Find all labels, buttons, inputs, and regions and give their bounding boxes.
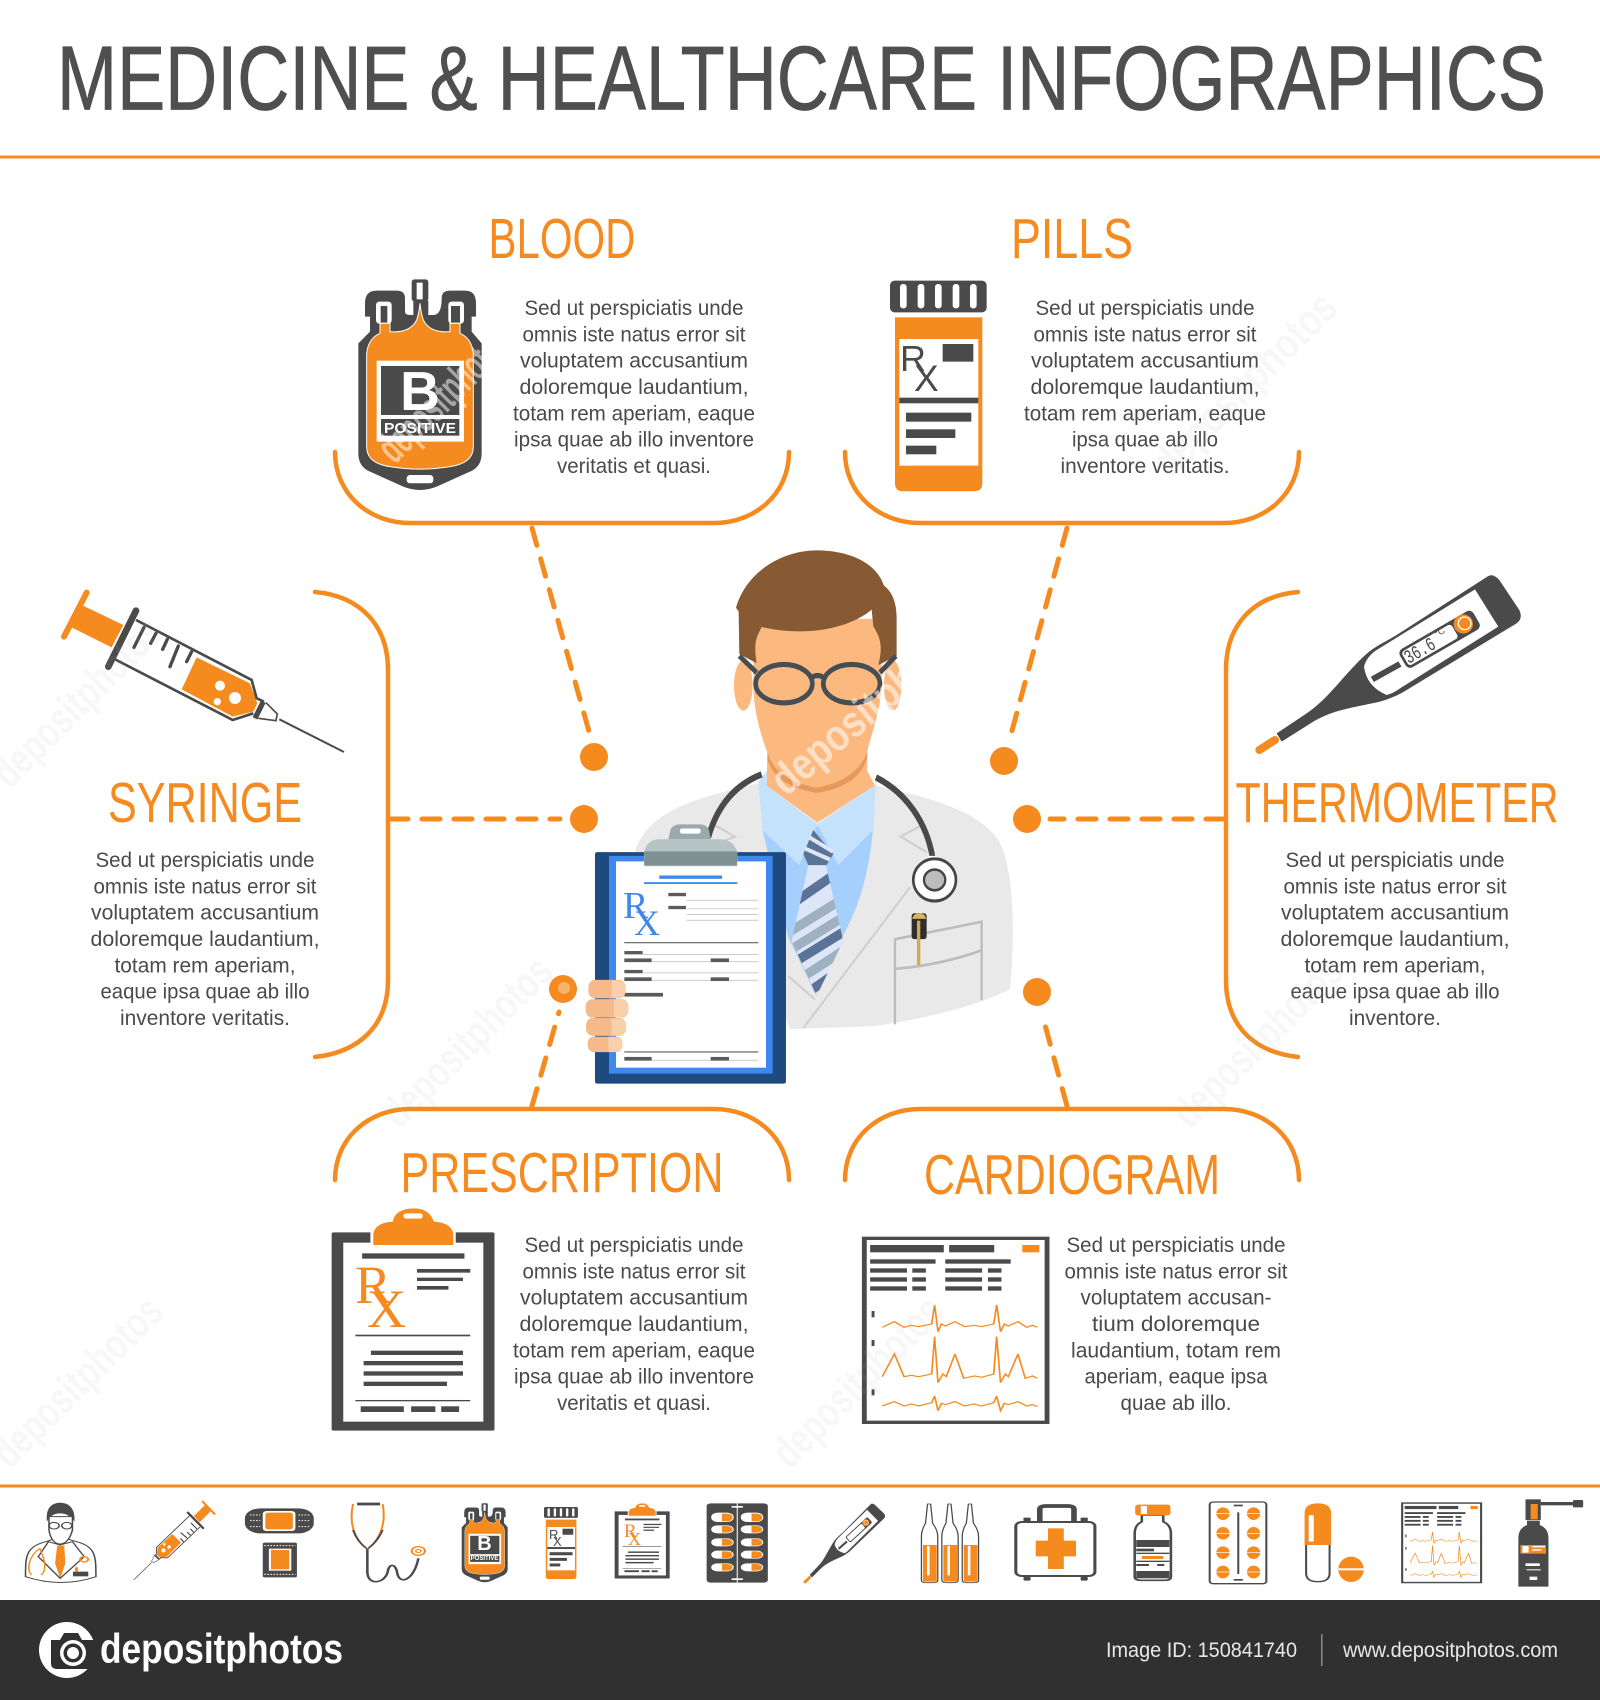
mini icon: prescription clipboard: R bbox=[624, 1521, 637, 1542]
footer url: www.depositphotos.com bbox=[1342, 1639, 1558, 1662]
text block: thermometer bbox=[1280, 849, 1510, 1030]
icon: thermometer: °C bbox=[1433, 625, 1447, 639]
footer logo: depositphotos bbox=[100, 1625, 343, 1672]
shirt bbox=[762, 826, 873, 997]
text block: syringe: doloremque laudantium, bbox=[90, 928, 320, 951]
text block: thermometer: Sed ut perspiciatis unde bbox=[1286, 849, 1504, 872]
icon: cardiogram sheet bbox=[864, 1238, 1047, 1422]
bracket: prescription bbox=[335, 1109, 789, 1180]
bracket: pills bbox=[845, 452, 1299, 523]
text block: prescription: omnis iste natus error sit bbox=[522, 1260, 746, 1283]
footer logo bbox=[39, 1622, 343, 1678]
text block: prescription bbox=[513, 1234, 755, 1415]
text block: thermometer: doloremque laudantium, bbox=[1280, 928, 1510, 951]
text block: syringe: eaque ipsa quae ab illo bbox=[100, 981, 310, 1004]
mini icon: blood bag bbox=[462, 1503, 508, 1582]
mini icon: thermometer bbox=[792, 1501, 895, 1582]
connector: pills to doctor bbox=[990, 528, 1067, 775]
text block: syringe: inventore veritatis. bbox=[120, 1007, 290, 1030]
text block: pills: Sed ut perspiciatis unde bbox=[1036, 297, 1254, 320]
mini icon: stethoscope bbox=[352, 1504, 425, 1582]
icon: thermometer: 36.6 bbox=[1401, 634, 1440, 669]
text block: prescription: Sed ut perspiciatis unde bbox=[524, 1234, 744, 1257]
text block: blood: doloremque laudantium, bbox=[520, 376, 748, 399]
panel: thermometer bbox=[1226, 575, 1558, 1057]
mini icon: pill bottle: X bbox=[553, 1534, 562, 1549]
clipboard inner bbox=[609, 856, 773, 1074]
heading: blood: BLOOD bbox=[488, 207, 636, 271]
icon: pill bottle: R bbox=[900, 338, 926, 379]
panel: blood bbox=[335, 207, 789, 523]
text block: pills: doloremque laudantium, bbox=[1030, 376, 1260, 399]
mini icon: bandage bbox=[245, 1508, 314, 1577]
mini icon: throat spray bbox=[1518, 1499, 1583, 1587]
text block: syringe bbox=[90, 849, 320, 1030]
glasses bbox=[739, 656, 896, 703]
panel: cardiogram bbox=[845, 1109, 1299, 1422]
text block: prescription: doloremque laudantium, bbox=[520, 1313, 748, 1336]
text block: thermometer: omnis iste natus error sit bbox=[1284, 875, 1507, 898]
icon: blood bag: POSITIVE bbox=[384, 420, 456, 437]
mini icon: doctor bbox=[26, 1503, 96, 1582]
clip bbox=[644, 824, 737, 866]
mini icon: pill bottle: R bbox=[549, 1527, 558, 1542]
text block: thermometer: voluptatem accusantium bbox=[1281, 902, 1509, 925]
mini icon: ampoules bbox=[921, 1504, 979, 1583]
bracket: thermometer bbox=[1226, 592, 1298, 1057]
heading: prescription: PRESCRIPTION bbox=[400, 1141, 724, 1205]
icon: pill bottle: X bbox=[914, 358, 939, 399]
mini icon: first aid kit bbox=[1016, 1506, 1095, 1581]
watermarks: depositphotos bbox=[1142, 283, 1347, 487]
mini icon: tablets bbox=[1210, 1502, 1266, 1584]
stethoscope bbox=[708, 774, 956, 901]
connector: thermometer to doctor bbox=[1013, 805, 1224, 833]
footer image id: Image ID: 150841740 bbox=[1106, 1639, 1297, 1662]
connector: prescription to doctor bbox=[532, 975, 577, 1106]
text block: cardiogram: laudantium, totam rem bbox=[1071, 1339, 1281, 1362]
text block: blood: veritatis et quasi. bbox=[557, 455, 711, 478]
text block: pills: totam rem aperiam, eaque bbox=[1024, 402, 1266, 425]
text block: cardiogram: omnis iste natus error sit bbox=[1064, 1260, 1288, 1283]
footer bar bbox=[0, 1600, 1600, 1700]
connector: blood to doctor bbox=[532, 528, 608, 771]
text block: prescription: ipsa quae ab illo inventore bbox=[514, 1366, 754, 1389]
heading: pills: PILLS bbox=[1011, 207, 1133, 271]
text block: pills: inventore veritatis. bbox=[1060, 455, 1230, 478]
clipboard board bbox=[595, 852, 786, 1084]
text block: cardiogram: quae ab illo. bbox=[1120, 1392, 1232, 1415]
text block: thermometer: inventore. bbox=[1349, 1007, 1441, 1030]
mini icon: prescription clipboard: X bbox=[628, 1529, 641, 1549]
bracket: blood bbox=[335, 452, 789, 523]
text block: prescription: veritatis et quasi. bbox=[557, 1392, 711, 1415]
collar right bbox=[817, 771, 877, 865]
text block: syringe: Sed ut perspiciatis unde bbox=[96, 849, 314, 872]
text block: blood: ipsa quae ab illo inventore bbox=[514, 429, 754, 452]
illustration: doctor with clipboard bbox=[586, 550, 1013, 1084]
clipboard Rx bbox=[623, 885, 660, 943]
bracket: cardiogram bbox=[845, 1109, 1299, 1180]
text block: syringe: omnis iste natus error sit bbox=[94, 875, 317, 898]
hand bbox=[586, 980, 628, 1052]
icon: pill bottle bbox=[890, 281, 987, 491]
text block: pills: voluptatem accusantium bbox=[1031, 350, 1259, 373]
watermarks: depositphotos bbox=[1162, 947, 1353, 1137]
mini icon: cardiogram bbox=[1402, 1503, 1481, 1583]
pen bbox=[912, 913, 927, 965]
mini icon: pill bottle bbox=[544, 1507, 578, 1579]
panel: prescription bbox=[332, 1109, 789, 1431]
text block: cardiogram bbox=[1064, 1234, 1288, 1415]
panel: pills bbox=[845, 207, 1299, 523]
watermarks bbox=[0, 283, 1353, 1477]
coat lapels bbox=[713, 824, 927, 1028]
text block: blood: Sed ut perspiciatis unde bbox=[524, 297, 744, 320]
chin shadow bbox=[767, 752, 867, 793]
text block: blood: voluptatem accusantium bbox=[520, 350, 748, 373]
watermarks: depositphotos bbox=[762, 1287, 953, 1477]
bracket: syringe bbox=[315, 592, 388, 1057]
collar left bbox=[758, 771, 817, 865]
icon: blood bag bbox=[358, 279, 482, 490]
mini icon: syringe bbox=[134, 1489, 217, 1598]
text block: pills: omnis iste natus error sit bbox=[1034, 323, 1257, 346]
clipboard Rx: R bbox=[623, 885, 649, 927]
doctor coat bbox=[635, 782, 1013, 1029]
hair bbox=[736, 550, 897, 665]
prescription sheet bbox=[616, 861, 766, 1068]
text block: blood bbox=[513, 297, 755, 478]
text block: cardiogram: Sed ut perspiciatis unde bbox=[1066, 1234, 1286, 1257]
text block: syringe: voluptatem accusantium bbox=[91, 902, 319, 925]
watermarks: depositphotos bbox=[367, 317, 522, 472]
text block: thermometer: eaque ipsa quae ab illo bbox=[1290, 981, 1500, 1004]
text block: thermometer: totam rem aperiam, bbox=[1304, 954, 1486, 977]
icon strip bbox=[0, 1484, 1600, 1598]
text block: pills: ipsa quae ab illo bbox=[1072, 429, 1218, 452]
mini icon: prescription clipboard bbox=[615, 1503, 670, 1578]
text block: cardiogram: tium doloremque bbox=[1092, 1313, 1260, 1336]
text block: blood: totam rem aperiam, eaque bbox=[513, 402, 755, 425]
icon: prescription clipboard: X bbox=[367, 1279, 406, 1339]
text block: syringe: totam rem aperiam, bbox=[114, 954, 296, 977]
text block: pills bbox=[1024, 297, 1266, 478]
text block: blood: omnis iste natus error sit bbox=[522, 323, 746, 346]
text block: prescription: totam rem aperiam, eaque bbox=[513, 1339, 755, 1362]
tie bbox=[792, 830, 843, 996]
icon: prescription clipboard bbox=[332, 1208, 494, 1431]
neck and face bbox=[753, 619, 882, 823]
mini icon: blister pack bbox=[707, 1503, 768, 1583]
heading: cardiogram: CARDIOGRAM bbox=[924, 1143, 1220, 1207]
text block: cardiogram: voluptatem accusan- bbox=[1080, 1287, 1272, 1310]
icon: prescription clipboard: R bbox=[355, 1255, 391, 1315]
heading: syringe: SYRINGE bbox=[108, 771, 302, 835]
panel: syringe bbox=[64, 592, 388, 1057]
text block: cardiogram: aperiam, eaque ipsa bbox=[1084, 1366, 1268, 1389]
watermarks: depositphotos bbox=[372, 947, 563, 1137]
ears bbox=[734, 660, 753, 711]
pocket bbox=[895, 922, 982, 1024]
icon: thermometer bbox=[1259, 575, 1521, 750]
watermarks: depositphotos bbox=[761, 603, 988, 805]
connector: syringe to doctor bbox=[390, 805, 598, 833]
clipboard Rx: X bbox=[634, 903, 660, 943]
connector: cardiogram to doctor bbox=[1023, 978, 1067, 1106]
mini icon: blood bag: POSITIVE bbox=[471, 1556, 498, 1562]
text block: prescription: voluptatem accusantium bbox=[520, 1287, 748, 1310]
mini icon: blood bag: B bbox=[477, 1533, 492, 1555]
mini icon: vial bbox=[1135, 1505, 1171, 1580]
mini icon: capsule and tablet bbox=[1305, 1503, 1364, 1582]
right ear bbox=[884, 660, 901, 711]
icon: blood bag: B bbox=[400, 360, 440, 422]
icon: syringe bbox=[64, 593, 344, 752]
